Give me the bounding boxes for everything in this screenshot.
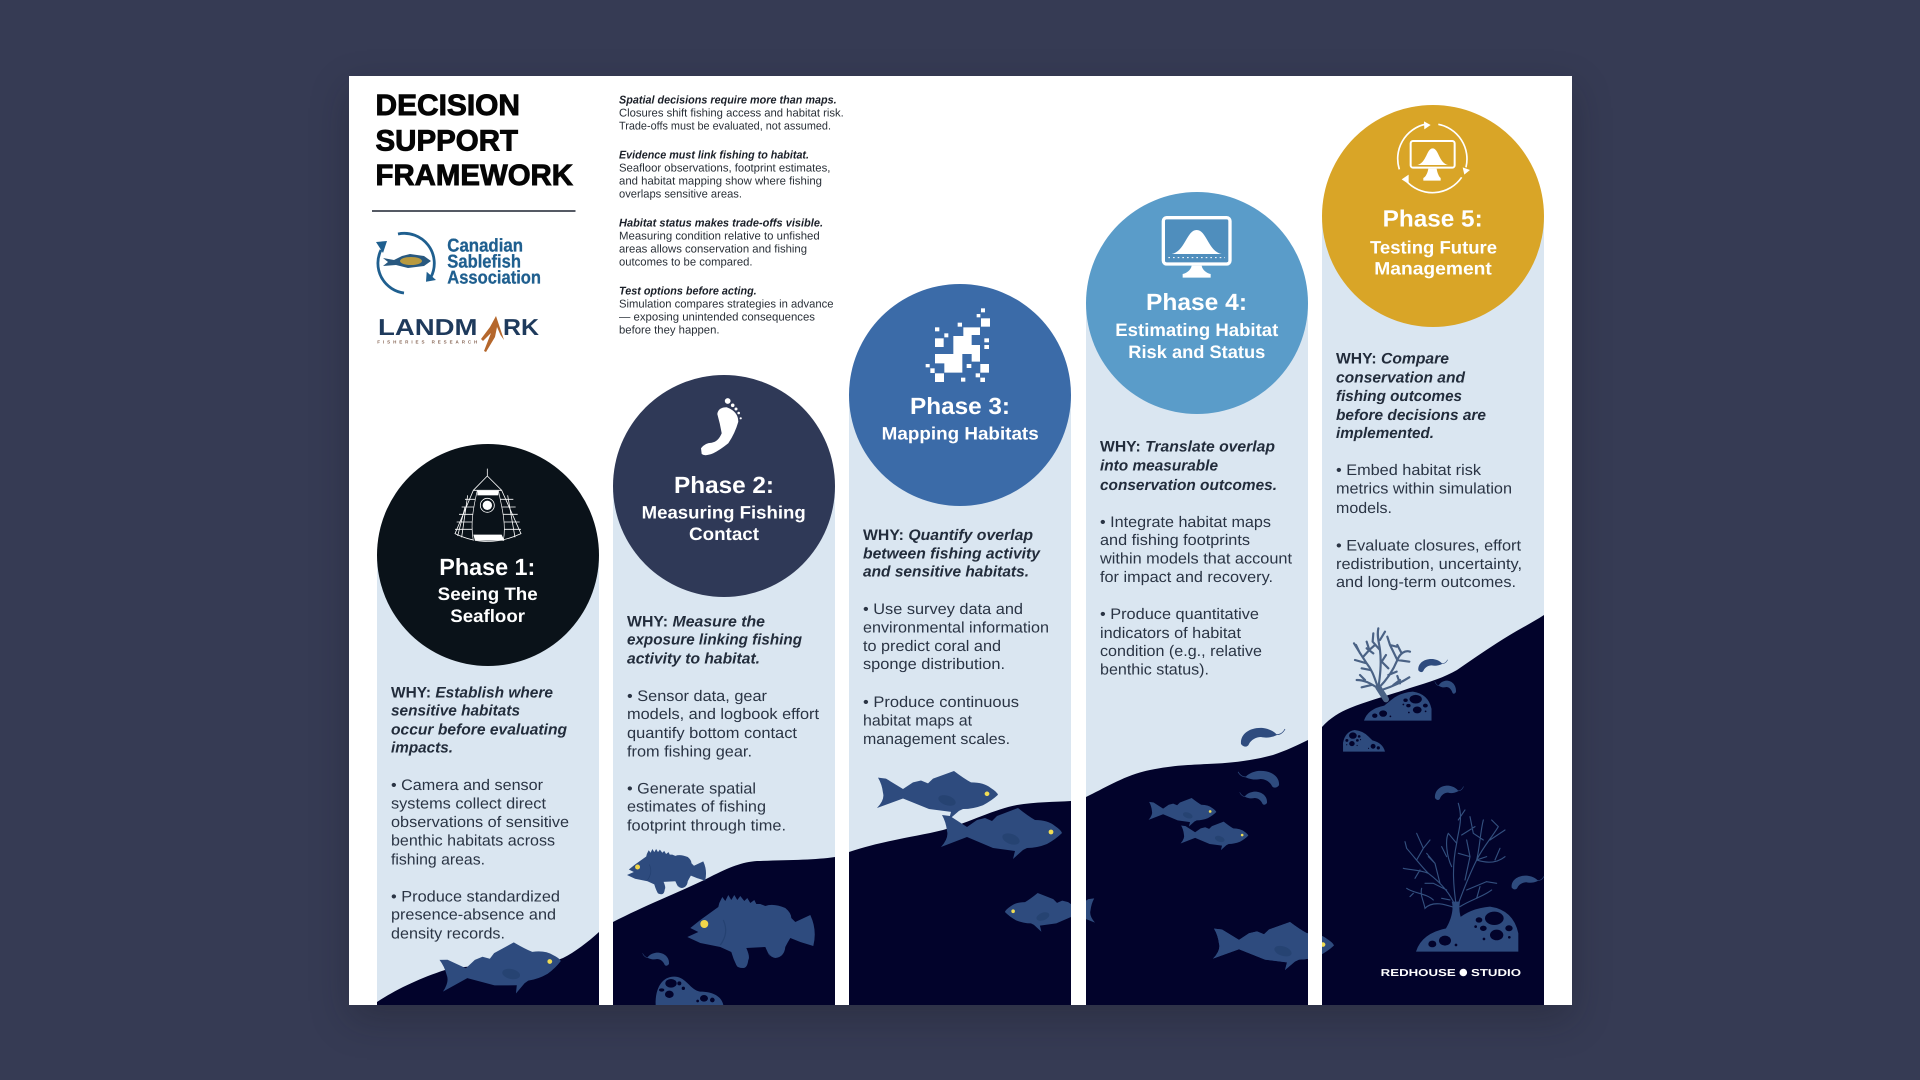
heading: Testing Future [1370, 237, 1497, 257]
bullet 2 [391, 888, 560, 942]
top coral [1354, 628, 1410, 699]
fish head from column 4 [1213, 922, 1334, 970]
heading: Phase 3: [910, 393, 1010, 419]
why statement: occur before evaluating [391, 722, 568, 738]
intro block 4 [619, 285, 834, 336]
column background [613, 486, 835, 1005]
coral reef bottom [1403, 786, 1544, 952]
bullet 1 [391, 777, 569, 868]
heading: Phase 5: [1383, 206, 1483, 232]
studio credit [1381, 968, 1521, 979]
bullet 2 [863, 694, 1019, 748]
lower sponge rock [1343, 730, 1385, 752]
intro block 2: Evidence must link fishing to habitat. [619, 149, 809, 161]
sponge rock [656, 977, 723, 1005]
seafloor wave [377, 932, 599, 1005]
why statement: WHY: Compare [1336, 350, 1449, 368]
infographic artwork [372, 94, 1544, 1005]
intro block 2 [619, 149, 830, 200]
intro text [619, 94, 844, 336]
bullet 2 [627, 780, 786, 834]
bullet 1: quantify bottom contact [627, 725, 798, 742]
why statement: WHY: Measure the [627, 614, 766, 630]
icon: monitor with bell curve [1163, 218, 1230, 278]
heading: Mapping Habitats [882, 424, 1039, 444]
title: SUPPORT [376, 124, 518, 157]
seafloor wave [849, 801, 1071, 1005]
panel: phase 3 [849, 284, 1071, 1005]
phase circle [1086, 192, 1308, 414]
heading: Seafloor [450, 606, 525, 626]
intro block 1: Spatial decisions require more than maps. [619, 94, 837, 106]
heading: Contact [689, 524, 759, 544]
why statement: before decisions are [1336, 407, 1486, 424]
intro block 4: — exposing unintended consequences [619, 311, 815, 323]
why statement: activity to habitat. [627, 650, 760, 668]
bullet 1: metrics within simulation [1336, 480, 1512, 498]
fish crossing columns 3 and 4 [1005, 893, 1095, 932]
seafloor wave [1086, 740, 1308, 1005]
bullet 1: observations of sensitive [391, 814, 569, 831]
bullet 1: models. [1336, 500, 1392, 517]
phase circle [849, 284, 1071, 506]
intro block 3: Habitat status makes trade-offs visible. [619, 217, 823, 229]
intro block 2: and habitat mapping show where fishing [619, 175, 822, 187]
why statement [863, 527, 1042, 580]
heading [642, 472, 806, 544]
heading: Measuring Fishing [642, 502, 806, 522]
bullet 2: benthic status). [1100, 662, 1209, 678]
why statement [1100, 438, 1277, 494]
fish [440, 942, 561, 994]
large rockfish [687, 895, 815, 968]
intro block 3: Measuring condition relative to unfished [619, 230, 820, 242]
bullet 1: models, and logbook effort [627, 706, 820, 723]
bullet 1: to predict coral and [863, 638, 1001, 655]
bullet 1: within models that account [1099, 550, 1293, 568]
bullet 2: estimates of fishing [627, 798, 766, 816]
bullet 2: redistribution, uncertainty, [1336, 556, 1522, 573]
bullet 2: • Produce continuous [863, 694, 1019, 711]
bullet 1: for impact and recovery. [1100, 569, 1273, 586]
large fish crossing columns 4 and 5 [1213, 922, 1308, 970]
bullet 1 [863, 601, 1049, 673]
bullet 1: • Use survey data and [863, 601, 1023, 618]
why statement: WHY: Quantify overlap [863, 527, 1033, 544]
logo wordmark: Association [447, 266, 541, 287]
bullet 2: indicators of habitat [1100, 625, 1242, 642]
column background [377, 555, 599, 1005]
bullet 2: • Generate spatial [627, 780, 756, 798]
heading: Phase 4: [1146, 289, 1247, 315]
icon: camera trap [455, 469, 521, 541]
logo wordmark: Sablefish [447, 251, 521, 272]
small fish pair [1149, 798, 1248, 850]
bullet 2 [1100, 606, 1262, 678]
bullet 1: benthic habitats across [391, 832, 555, 850]
heading [1115, 289, 1278, 362]
panel: phase 5 [1213, 105, 1544, 1005]
shrimp group [1238, 728, 1285, 805]
bullet 1: • Integrate habitat maps [1100, 514, 1271, 531]
bullet 1: sponge distribution. [863, 656, 1005, 673]
bullet 2: • Evaluate closures, effort [1336, 538, 1522, 554]
shrimp [643, 953, 669, 966]
coral reef top [1343, 628, 1456, 752]
why statement [627, 614, 803, 668]
intro block 3 [619, 217, 823, 268]
shrimp pair [1418, 659, 1456, 694]
why statement: fishing outcomes [1336, 388, 1462, 405]
heading [882, 393, 1039, 444]
logo: Landmark Fisheries Research: LANDM [378, 314, 478, 340]
why statement: conservation and [1336, 370, 1466, 386]
fish middle [941, 808, 1062, 859]
bullet 2: management scales. [863, 731, 1010, 748]
column background [849, 395, 1071, 1005]
heading: Phase 2: [674, 472, 774, 498]
why statement: and sensitive habitats. [863, 564, 1029, 580]
logo: Landmark Fisheries Research: FISHERIES RESEARCH [377, 339, 477, 344]
intro block 3: outcomes to be compared. [619, 256, 752, 268]
why statement: into measurable [1100, 458, 1218, 474]
why statement: conservation outcomes. [1100, 477, 1277, 494]
logo wordmark [447, 235, 541, 287]
heading [1370, 206, 1497, 278]
bullet 1: from fishing gear. [627, 744, 752, 760]
panel: phase 2 [613, 375, 835, 1005]
seafloor wave [613, 857, 835, 1005]
bullet 1: and fishing footprints [1100, 532, 1250, 549]
intro block 1: Closures shift fishing access and habitat risk. [619, 108, 844, 120]
logo ring with arrows [378, 233, 434, 293]
bullet 1: • Camera and sensor [391, 777, 543, 794]
logo fish [383, 254, 431, 268]
why statement: WHY: Establish where [391, 684, 553, 702]
phase circle [613, 375, 835, 597]
bullet 2: and long-term outcomes. [1336, 574, 1516, 591]
bullet 2 [1336, 538, 1522, 591]
heading: Seeing The [438, 584, 538, 604]
fish top [877, 771, 998, 819]
white card background [349, 76, 1572, 1005]
top sponge rock [1364, 692, 1432, 721]
bullet 2: • Produce quantitative [1100, 606, 1259, 623]
column background [1322, 216, 1544, 1005]
shrimp pair [1435, 786, 1544, 889]
heading [438, 554, 538, 626]
bullet 1 [1099, 514, 1293, 586]
logo wordmark: Canadian [447, 235, 523, 256]
bullet 2: • Produce standardized [391, 888, 560, 906]
bullet 2: footprint through time. [627, 818, 786, 834]
orange arrow letter A [481, 316, 504, 352]
bullet 1: • Embed habitat risk [1336, 462, 1481, 479]
bullet 2: presence-absence and [391, 906, 556, 924]
phase circle [377, 444, 599, 666]
bullet 1 [1336, 462, 1512, 517]
title: DECISION [376, 89, 520, 122]
why statement: WHY: Translate overlap [1100, 438, 1275, 456]
why statement [391, 684, 568, 756]
bullet 1: systems collect direct [391, 796, 547, 812]
bullet 2: density records. [391, 926, 505, 942]
bullet 1: fishing areas. [391, 852, 485, 868]
intro block 4: before they happen. [619, 324, 720, 336]
bullet 1: environmental information [863, 620, 1049, 636]
heading: Phase 1: [439, 554, 535, 580]
icon: habitat pixels [926, 308, 990, 382]
bullet 2: habitat maps at [863, 712, 973, 730]
bullet 2: condition (e.g., relative [1100, 643, 1262, 660]
heading: Risk and Status [1128, 342, 1265, 362]
seafloor wave [1322, 615, 1544, 1005]
why statement [1336, 350, 1486, 442]
bullet 1 [627, 688, 820, 760]
intro block 4: Simulation compares strategies in advance [619, 298, 834, 310]
why statement: between fishing activity [863, 546, 1042, 562]
logo: Canadian Sablefish Association [376, 233, 541, 293]
why statement: implemented. [1336, 425, 1434, 442]
intro block 2: overlaps sensitive areas. [619, 188, 742, 200]
intro block 2: Seafloor observations, footprint estimates, [619, 162, 830, 174]
intro block 1 [619, 94, 844, 132]
bullet 1: • Sensor data, gear [627, 688, 767, 705]
large branching coral [1403, 803, 1505, 908]
title: FRAMEWORK [376, 159, 574, 192]
intro block 4: Test options before acting. [619, 285, 757, 297]
column background [1086, 303, 1308, 1005]
logo: Landmark Fisheries Research: RK [503, 314, 539, 340]
title [376, 89, 574, 192]
intro block 1: Trade-offs must be evaluated, not assumed. [619, 120, 831, 132]
heading: Estimating Habitat [1115, 320, 1278, 340]
intro block 3: areas allows conservation and fishing [619, 243, 807, 255]
panel: phase 4 [1005, 192, 1334, 1005]
panel: phase 1 [377, 444, 599, 1005]
heading: Management [1374, 258, 1492, 278]
studio credit: REDHOUSE [1381, 968, 1456, 979]
studio credit: STUDIO [1471, 968, 1521, 979]
icon: simulation monitor [1398, 121, 1470, 193]
icon: footprint [701, 398, 742, 455]
small rockfish [627, 849, 706, 894]
why statement: sensitive habitats [391, 702, 520, 720]
why statement: impacts. [391, 740, 453, 756]
coral trunk and rock [1416, 902, 1518, 952]
phase circle [1322, 105, 1544, 327]
why statement: exposure linking fishing [627, 632, 803, 648]
logo: Landmark Fisheries Research [377, 314, 539, 352]
